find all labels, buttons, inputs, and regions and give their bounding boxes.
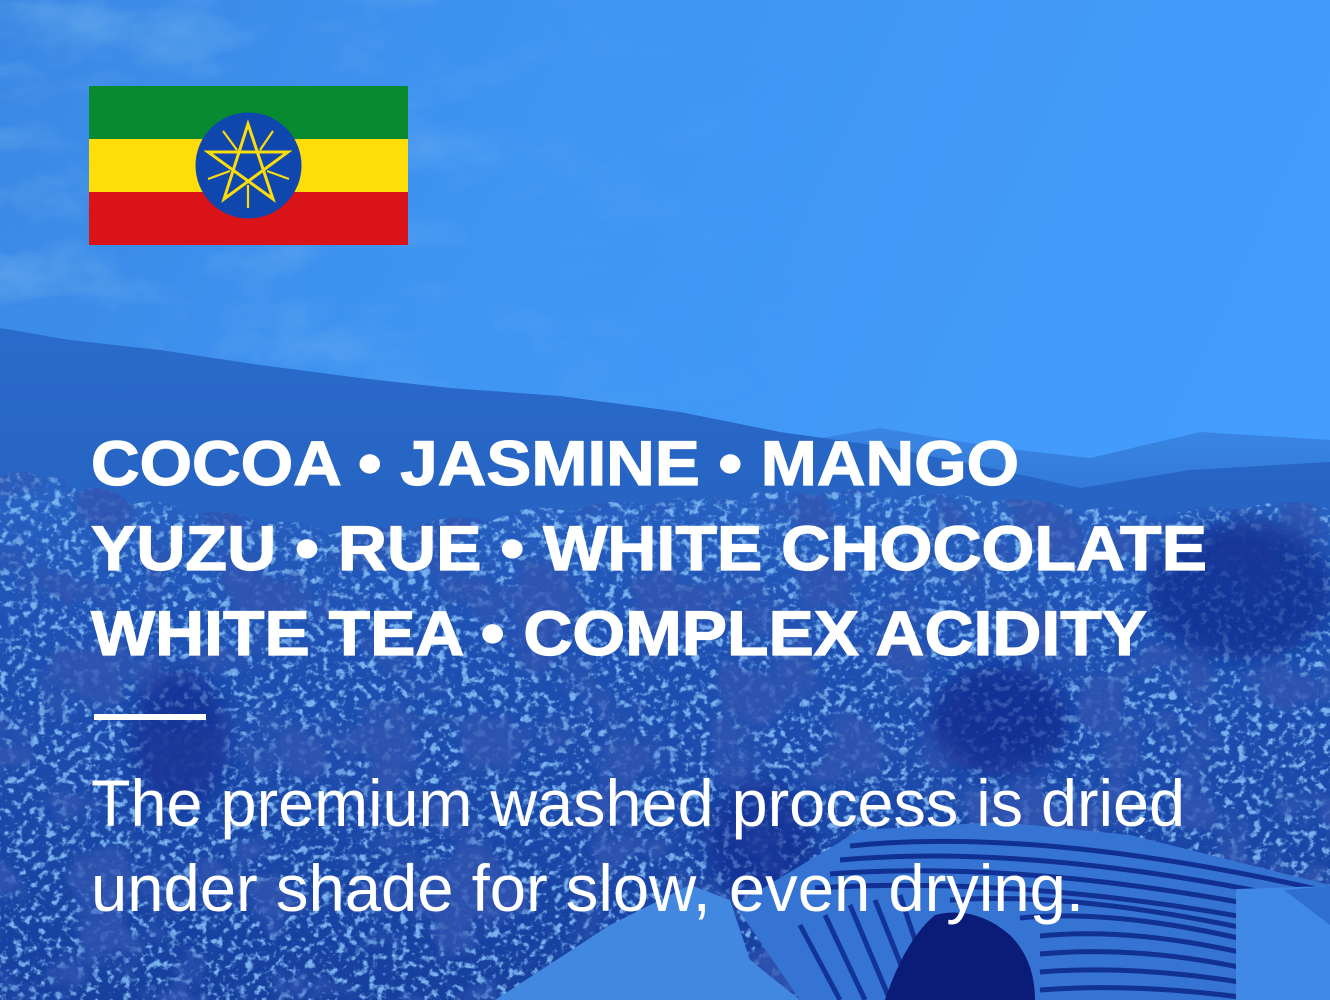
flag of Ethiopia xyxy=(89,86,408,245)
background: concrete tank xyxy=(1236,886,1330,1000)
flavor line 3: WHITE TEA • COMPLEX ACIDITY xyxy=(91,599,1147,669)
flag emblem: star xyxy=(208,124,289,208)
flag stripe: green xyxy=(89,86,408,139)
flag stripe: red xyxy=(89,192,408,245)
flavor line 1: COCOA • JASMINE • MANGO xyxy=(91,429,1019,499)
background: worker's head xyxy=(885,912,1035,1000)
flag emblem: blue disc xyxy=(196,112,302,218)
flag stripe: yellow xyxy=(89,139,408,192)
flavor notes heading xyxy=(91,429,1207,669)
process description xyxy=(91,766,1185,925)
background: drying beds xyxy=(730,820,1330,1000)
background: clouds xyxy=(0,0,495,384)
flavor line 2: YUZU • RUE • WHITE CHOCOLATE xyxy=(91,514,1207,584)
background: distant hills xyxy=(0,328,1330,600)
description line 1: The premium washed process is dried xyxy=(91,766,1185,840)
background: dirt path xyxy=(495,885,800,1000)
divider rule xyxy=(94,714,206,720)
description line 2: under shade for slow, even drying. xyxy=(91,851,1084,925)
background: forest xyxy=(0,460,1330,1000)
